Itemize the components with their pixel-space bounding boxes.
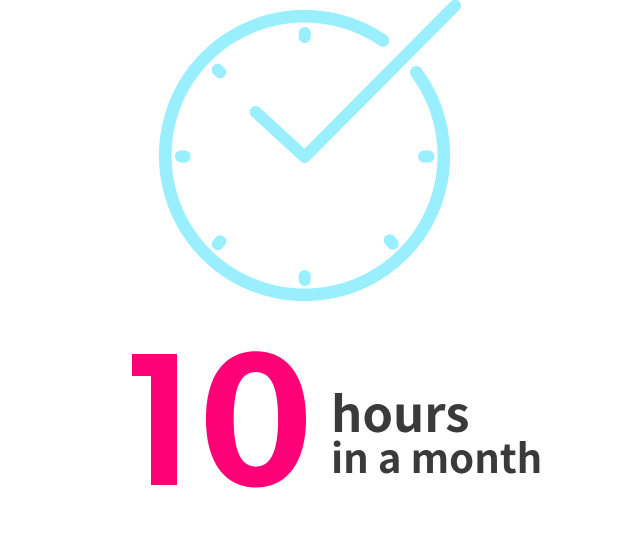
caption (331, 376, 542, 485)
clock face ring (165, 16, 444, 295)
check mark (256, 6, 455, 157)
caption line: in a month: in a month (331, 427, 542, 485)
digit zero: 0 (197, 275, 315, 538)
caption line: hours: hours (331, 376, 469, 447)
big number (132, 275, 315, 538)
hour ticks (181, 33, 428, 280)
